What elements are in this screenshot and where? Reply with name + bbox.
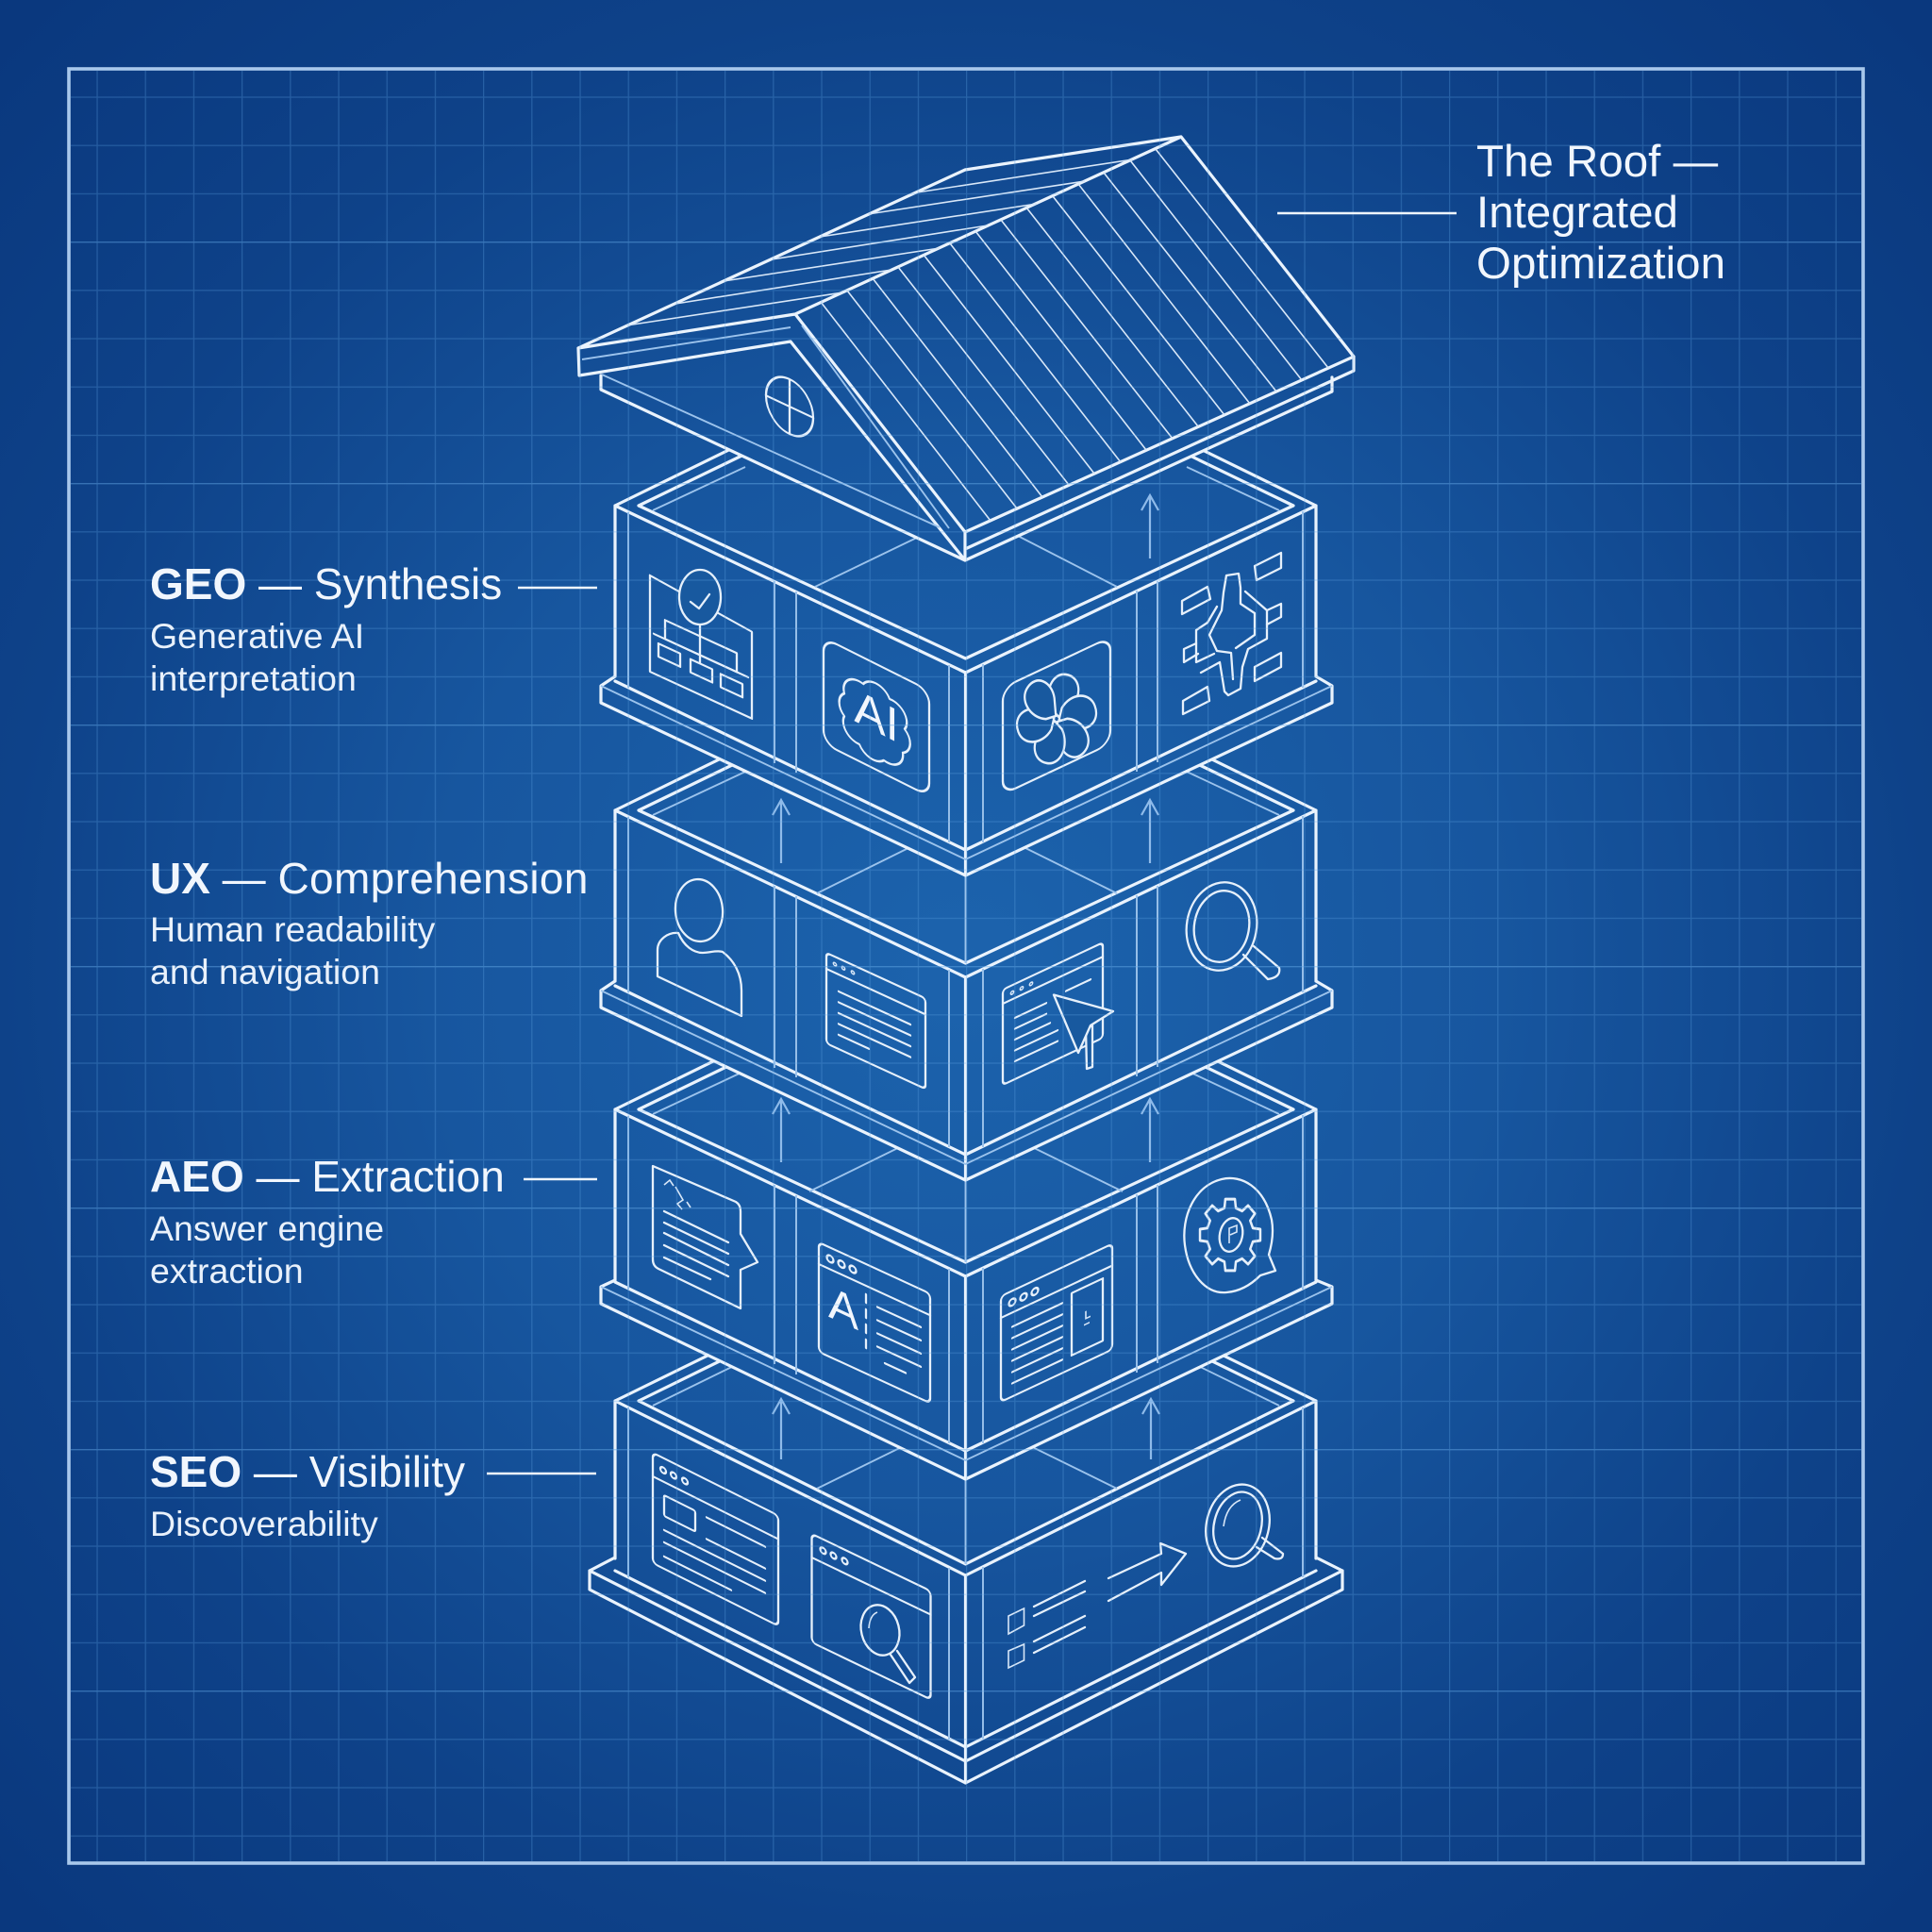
icon: text window: [826, 953, 925, 1089]
label: AEO: AEO — Extraction: [150, 1152, 505, 1201]
roof left slope hatching: [626, 159, 1133, 325]
label: the roof: The Roof —: [1476, 137, 1719, 187]
icon: browser page: [653, 1453, 778, 1626]
label: GEO: GEO — Synthesis: [150, 559, 502, 608]
icon: checklist, arrow and magnifier: [1008, 1477, 1283, 1668]
label: SEO: SEO — Visibility: [150, 1447, 465, 1496]
roof right slope hatching: [821, 149, 1328, 521]
tier: SEO visibility: [590, 1229, 1342, 1783]
icon: org chart with check: [650, 570, 752, 719]
roof: [578, 137, 1354, 560]
icon: browser with search: [811, 1534, 930, 1699]
label: AEO: extraction: [150, 1251, 304, 1291]
label: UX: UX — Comprehension: [150, 854, 589, 903]
tier: UX comprehension: [601, 639, 1332, 1180]
tier: AEO extraction: [601, 938, 1332, 1479]
icon: knot logo card: [1003, 637, 1110, 794]
label: the roof: Optimization: [1476, 239, 1725, 289]
icon: circuit synthesis: [1182, 553, 1281, 714]
icon: window with letter A: A: [828, 1275, 858, 1341]
tier: GEO synthesis: [601, 334, 1332, 875]
label: AEO: [150, 1152, 597, 1291]
icon: person: [658, 877, 741, 1016]
icon: speech bubble with gear: [1184, 1178, 1275, 1292]
icon: AI brain card: AI: [854, 679, 899, 754]
icon: answer speech document: [653, 1166, 758, 1308]
icon: window with letter A: [819, 1242, 930, 1403]
label: UX: and navigation: [150, 952, 380, 991]
label: SEO: Discoverability: [150, 1504, 378, 1543]
label: GEO: [150, 559, 597, 698]
label: UX: [150, 854, 589, 991]
icon: gable window: [766, 368, 813, 445]
label: UX: Human readability: [150, 909, 435, 949]
label: AEO: Answer engine: [150, 1208, 384, 1248]
label: GEO: interpretation: [150, 658, 357, 698]
label: GEO: Generative AI: [150, 616, 364, 656]
label: the roof: Integrated: [1476, 188, 1678, 238]
label: the roof: [1277, 137, 1725, 289]
icon: browser with cursor: [1003, 942, 1113, 1085]
label: SEO: [150, 1447, 596, 1543]
icon: browser with sidebar: [1001, 1244, 1112, 1402]
icon: AI brain card: [824, 638, 929, 796]
icon: magnifier: [1179, 876, 1279, 979]
